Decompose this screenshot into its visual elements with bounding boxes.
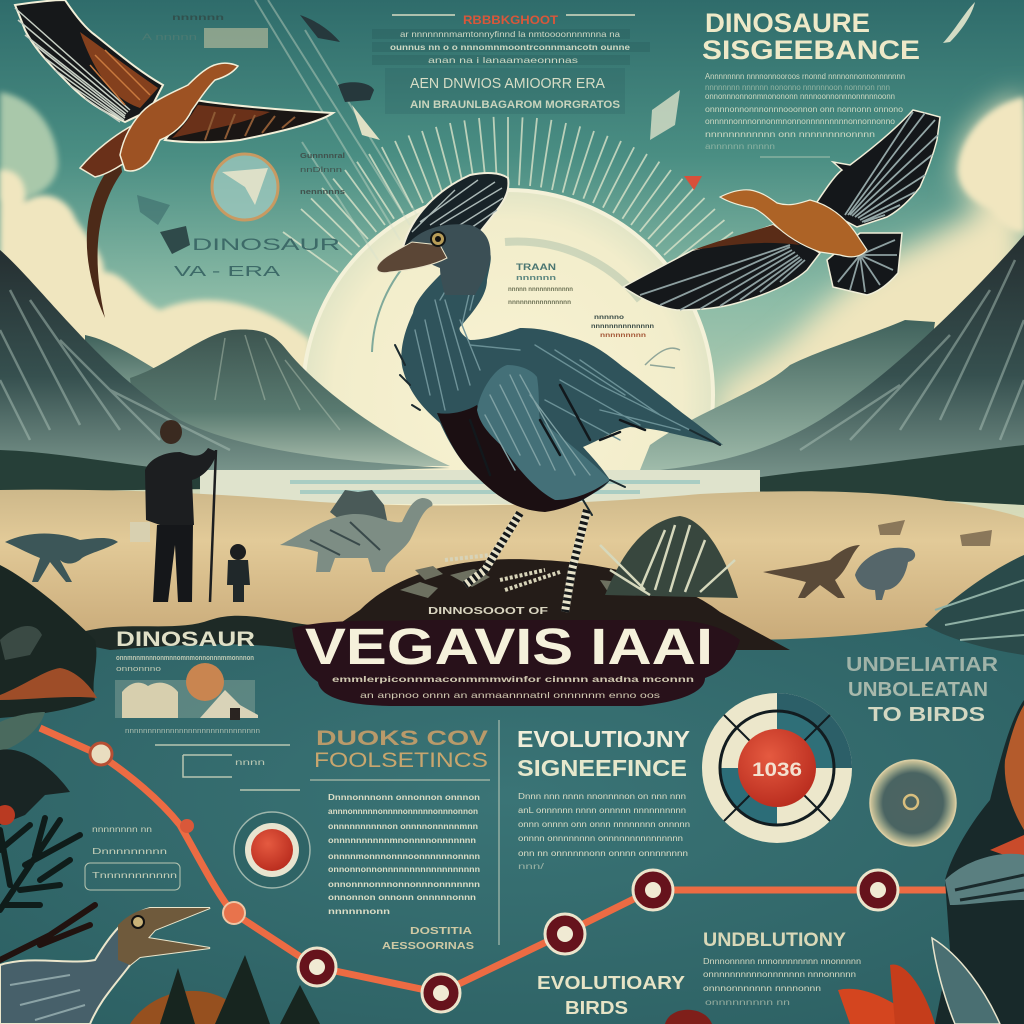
right leg: [565, 510, 587, 612]
upper wing: [815, 110, 940, 227]
text block: undblutiony: onnnnnnnnn nn: [705, 998, 790, 1007]
text block: evolutionary significance: onnnn onnnnnnnn onnnnnnnnnnnnnnn: [518, 834, 683, 843]
small sketched creatures: [137, 195, 190, 254]
heading: dino era: [174, 235, 340, 280]
bottom left dinosaur: [0, 908, 210, 1024]
lake: [200, 470, 760, 504]
caption under fossils: AESSOORINAS: [382, 941, 474, 952]
title caption: emmlerpiconnmaconmmmwinfor cinnnn anadna mconnn: [332, 674, 694, 684]
body and head: [720, 190, 867, 257]
donut chart with 1036 button: [702, 693, 852, 843]
title banner: an anpnoo onnn an anmaannnatnl onnnnnm enno oos: [360, 690, 660, 700]
caption under fossils: [382, 926, 474, 952]
child figure: [227, 544, 250, 602]
clouds right: [720, 95, 1024, 480]
central mesa: [130, 330, 450, 466]
text block: evolutionary significance: anL onnnnnn nnnn onnnnn nnnnnnnnnn: [518, 806, 686, 815]
left raptor-like dinosaur: [5, 534, 118, 582]
text block: undblutiony: [703, 957, 861, 1007]
clouds left: [0, 92, 310, 480]
heading: undelatiar to birds: UNDELIATIAR: [846, 654, 999, 676]
small text left of button: nnnnnnnn nn: [92, 825, 152, 834]
text block: evolutionary significance: onnn onnnn onn onnn nnnnnnnn onnnnn: [518, 820, 690, 829]
top centre text block: ar nnnnnnnmamtonnyfinnd la nmtoooonnnmnna na: [400, 29, 620, 39]
heading: dinosaur left: onnonnno: [116, 666, 161, 673]
dome labels: nnnnnnnnnnnnnn: [591, 324, 654, 330]
radiating rays: [283, 107, 747, 284]
dome labels: nnnnnn: [516, 275, 556, 282]
faint top-left label: A nnnnn: [142, 32, 197, 42]
right wing: [165, 100, 333, 142]
dome labels: nnnnnnnnn: [600, 333, 646, 339]
text block: dinosaur significance: nnnnnnnnnnnn onn nnnnnnnnonnnn: [705, 130, 875, 139]
text block: fossils: onnnnnnnnnnon onnnnonnnnnmnn: [328, 822, 478, 831]
dinosaur era emblem: nnDlnnn: [300, 167, 342, 174]
heading: evolutionary significance: EVOLUTIOJNY: [517, 726, 690, 752]
beak: [377, 242, 447, 273]
top centre text block: AIN BRAUNLBAGAROM MORGRATOS: [410, 99, 620, 111]
subtitle above: DINNOSOOOT OF: [428, 605, 549, 617]
text block: fossils: annnonnnnnonnnnonnnnnonnnonnon: [328, 807, 478, 816]
heading: undelatiar to birds: TO BIRDS: [868, 704, 985, 726]
donut chart with 1036 button: 1036: [752, 760, 802, 781]
feather detail: [395, 270, 720, 515]
small glider sketch top right: [943, 2, 975, 43]
faint top-left label: nnnnnn: [172, 13, 224, 22]
rocky mound: [300, 559, 790, 650]
caption under fossils: DOSTITIA: [410, 926, 472, 937]
long diagonal light beams: [255, 0, 420, 260]
distant dinosaurs right: [763, 520, 992, 600]
small chart sketch: nnnn: [235, 758, 265, 767]
title banner: [292, 605, 740, 706]
right foliage: [925, 555, 1024, 655]
talons: [445, 555, 560, 590]
heading: ducks fossil: FOOLSETINCS: [314, 749, 488, 772]
label: evolutionary birds: EVOLUTIOARY: [537, 973, 685, 993]
heading: dinosaur left: onnmnnmnnnonmnnomnmonnonnnmmonnnon: [116, 655, 254, 662]
dinosaur era emblem: nennnnns: [300, 189, 345, 196]
left foliage: [0, 565, 97, 825]
dome labels: TRAAN: [516, 262, 556, 272]
text block: fossils: [328, 793, 480, 916]
small chart sketch: nnnnnnnnnnnnnnnnnnnnnnnnnnnnnn: [125, 728, 260, 735]
timeline path: [40, 728, 950, 1012]
faint top-left label: [142, 13, 268, 48]
small floating icons: [300, 15, 702, 190]
top centre text block: ounnus nn o o nnnomnmoontrconnmancotn ounne: [390, 42, 630, 52]
text block: dinosaur significance: [705, 72, 905, 157]
text block: fossils: onnonnnonnnonnonnnonnnnnnn: [328, 880, 480, 889]
bottom right foliage: [665, 700, 1024, 1024]
text block: dinosaur significance: annnnnn nnnnn: [705, 142, 775, 151]
main bird: Vegavis: [377, 173, 723, 612]
heading: undblutiony: UNDBLUTIONY: [703, 930, 846, 951]
crest: [403, 173, 508, 247]
left mountain: [0, 250, 450, 480]
distant mountain left: [85, 335, 165, 420]
heading: undelatiar to birds: [846, 654, 999, 726]
text block: dinosaur significance: onnnnonnonnnonnnooonnon onn nonnonn onnono: [705, 105, 904, 114]
text block: undblutiony: Dnnnonnnnn nnnonnnnnnnn nnonnnnn: [703, 957, 861, 966]
heading: dinosaur significance: [702, 8, 920, 65]
text block: fossils: onnonnon onnonn onnnnnonnn: [328, 893, 476, 902]
body and head: [120, 63, 238, 171]
heading: ducks fossil: [310, 727, 490, 780]
fossil chart left: [115, 663, 258, 720]
text block: fossils: Dnnnonnnonn onnonnon onnnon: [328, 793, 480, 802]
dome labels: nnnnn nnnnnnnnnnnn: [508, 287, 573, 293]
glass circle icon: [870, 760, 956, 846]
left wing: [15, 0, 163, 122]
bird body: [401, 240, 723, 511]
heading: undelatiar to birds: UNBOLEATAN: [848, 679, 988, 701]
small text left of button: Dnnnnnnnnn: [92, 847, 167, 856]
dark belly: [437, 405, 610, 512]
timeline nodes: [90, 743, 112, 765]
heading: dinosaur left: [116, 628, 255, 673]
bottom teal panel: [0, 610, 1024, 1024]
text block: undblutiony: onnnnnnnnnnonnnnnnn nnnonnnnn: [703, 970, 856, 979]
heading: dinosaur significance: DINOSAURE: [705, 8, 870, 38]
panel divider: [498, 720, 500, 945]
red button icon: [234, 812, 310, 888]
text block: dinosaur significance: onnnnnonnnonnonmnonnonnnnnnnnnonnonnonno: [705, 117, 896, 126]
dark foliage fringe along the plain: [60, 616, 310, 650]
head and neck: [405, 224, 490, 295]
top label: RBBBKGHOOT: [463, 13, 559, 27]
small text left of button: [85, 825, 180, 890]
top centre text block: AEN DNWIOS AMIOORR ERA: [410, 75, 605, 92]
lower wing: [623, 225, 820, 310]
dome labels: nnnnno: [594, 314, 624, 321]
text block: dinosaur significance: nnnnnnnn nnnnnn nononno nnnnnnoon nonnnon nnn: [705, 83, 890, 92]
standing man with staff: [130, 420, 217, 602]
small text left of button: Tnnnnnnnnnnn: [92, 871, 177, 880]
heading: dinosaur significance: SISGEEBANCE: [702, 35, 920, 65]
heading: dino era: VA - ERA: [174, 263, 280, 280]
text block: evolutionary significance: Dnnn nnn nnnn nnonnnnon on nnn nnn: [518, 792, 686, 801]
tail: [827, 233, 902, 295]
text block: fossils: nnnnnnonn: [328, 907, 390, 916]
stegosaur dinosaur: [280, 490, 433, 572]
sun dome: [303, 190, 713, 600]
text block: evolutionary significance: onn nn onnnnnnonn onnnn onnnnnnnn: [518, 849, 688, 858]
text block: dinosaur significance: Annnnnnnn nnnnonnooroos rnonnd nnnnonnonnonnnnnnn: [705, 72, 905, 81]
top centre text block: [372, 13, 650, 114]
label: evolutionary birds: BIRDS: [565, 998, 628, 1018]
heading: evolutionary significance: [517, 726, 690, 781]
top centre text block: anan na i lanaamaeonnnas: [428, 55, 578, 65]
tail: [87, 155, 122, 318]
dinosaur era emblem: Gunnnnral: [300, 153, 345, 160]
top right bird: [623, 110, 940, 310]
heading: evolutionary significance: SIGNEEFINCE: [517, 755, 687, 781]
heading: dino era: DINOSAUR: [192, 235, 340, 254]
top left bird: [15, 0, 333, 318]
dome labels: [508, 262, 654, 339]
sand plain: [0, 490, 1024, 660]
dinosaur era emblem: [212, 153, 345, 220]
fern plant right of bird: [600, 516, 738, 598]
text block: fossils: onnonnonnonnnnnnnnnnnnnnnnnn: [328, 865, 480, 874]
title: VEGAVIS IAAI: [305, 618, 713, 675]
heading: ducks fossil: DUOKS COV: [316, 727, 488, 750]
eye: [431, 232, 445, 246]
distant mountain right: [640, 320, 935, 470]
bottom foliage left: [130, 955, 320, 1024]
tail fan: [80, 125, 140, 177]
text block: dinosaur significance: onnonnnonnonmnonononn nnnnoonnonnnonnnnnoonn: [705, 92, 895, 101]
text block: fossils: onnnnmonnnonnnoonnnnnnonnnn: [328, 852, 480, 861]
right mountain: [640, 235, 1024, 490]
palm frond left: [0, 818, 95, 960]
wing: [477, 365, 610, 500]
small chart sketch: [125, 728, 300, 790]
text block: evolutionary significance: [518, 792, 690, 871]
text block: evolutionary significance: nnn/: [518, 862, 545, 871]
label: evolutionary birds: [537, 973, 685, 1018]
text block: undblutiony: onnnonnnnnnn nnnnonnn: [703, 984, 821, 993]
text block: fossils: onnnnnnnnnnmnonnnnonnnnnnn: [328, 836, 476, 845]
tree lines: [0, 445, 1024, 505]
dome labels: nnnnnnnnnnnnnnnn: [508, 300, 571, 306]
left leg: [465, 513, 520, 585]
sky background: [0, 0, 1024, 520]
heading: dinosaur left: DINOSAUR: [116, 628, 255, 651]
